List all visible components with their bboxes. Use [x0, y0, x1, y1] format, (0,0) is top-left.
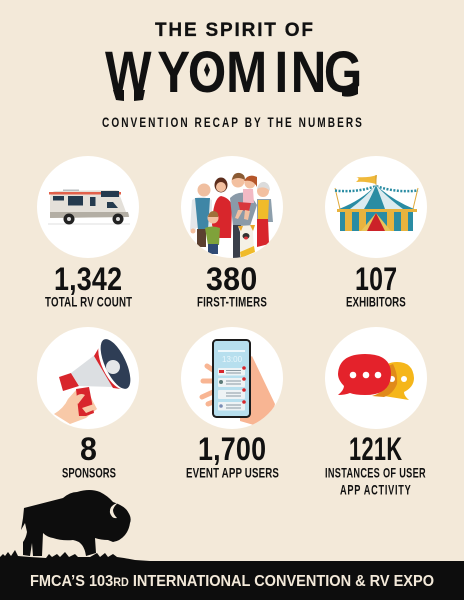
- label: SPONSORS: [62, 466, 116, 481]
- label: INSTANCES OF USER: [325, 467, 426, 481]
- dog: [238, 225, 255, 258]
- footer band: [0, 561, 464, 600]
- number: 8: [80, 431, 97, 467]
- heading: wyoming: WYOMING: [105, 40, 362, 105]
- father: [230, 173, 257, 258]
- icon: circus tent: [325, 156, 427, 258]
- icon: megaphone: [37, 327, 139, 429]
- panel: first-timers: [181, 156, 283, 310]
- panel: exhibitors: [325, 156, 427, 310]
- label: EVENT APP USERS: [186, 466, 279, 481]
- icon: phone in hand: 13:00: [222, 355, 243, 364]
- number: 1,342: [54, 262, 122, 298]
- grandmother: [257, 182, 273, 247]
- label: EXHIBITORS: [346, 295, 406, 310]
- icon: phone in hand: [181, 327, 283, 429]
- icon: chat bubbles: [325, 327, 427, 429]
- number: 380: [206, 261, 257, 297]
- panel: event app users: [181, 327, 283, 481]
- label: TOTAL RV COUNT: [45, 295, 133, 310]
- label: [325, 467, 426, 498]
- daughter: [235, 176, 257, 220]
- mother: [212, 178, 232, 238]
- heading: the spirit of: THE SPIRIT OF: [155, 20, 313, 41]
- icon: bison horn: [110, 503, 118, 518]
- panel: total rv count: [37, 156, 139, 310]
- icon: motorhome: [37, 156, 139, 258]
- number: 1,700: [198, 432, 266, 468]
- title: [102, 20, 362, 130]
- panel: user app activity: [325, 327, 427, 498]
- footer banner text: FMCA’S 103RD INTERNATIONAL CONVENTION & RV EXPO: [30, 573, 434, 590]
- subtitle: CONVENTION RECAP BY THE NUMBERS: [102, 114, 362, 130]
- son: [205, 211, 220, 254]
- number: 121K: [349, 431, 402, 467]
- icon: bison silhouette: [0, 490, 150, 562]
- panel: sponsors: [37, 327, 139, 481]
- label: APP ACTIVITY: [340, 484, 411, 498]
- number: 107: [355, 262, 397, 298]
- label: FIRST-TIMERS: [197, 295, 267, 310]
- icon: family: [181, 156, 283, 258]
- grandfather: [190, 184, 212, 247]
